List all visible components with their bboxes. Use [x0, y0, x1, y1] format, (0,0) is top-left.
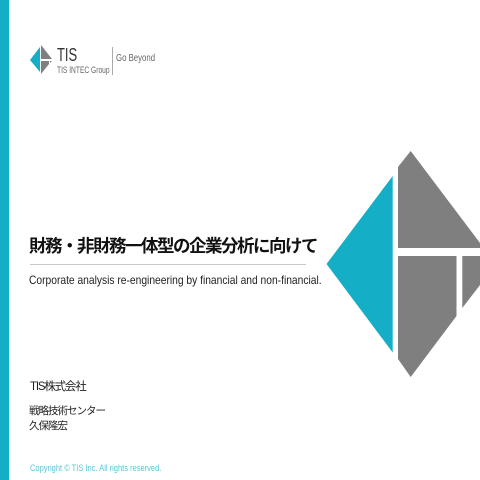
logo icon	[30, 45, 52, 74]
logo wordmark: TIS	[57, 45, 77, 65]
small right gray shape	[462, 256, 480, 308]
title: 財務・非財務一体型の企業分析に向けて	[29, 236, 317, 256]
title rule	[30, 264, 306, 265]
company name: TIS株式会社	[30, 381, 86, 393]
diamond graphic	[326, 151, 480, 377]
logo divider	[112, 47, 113, 75]
left accent bar	[0, 0, 9, 480]
logo: TIS INTEC Group	[30, 45, 155, 75]
lower gray shape	[398, 256, 456, 377]
upper gray shape	[398, 151, 480, 248]
department and author: 久保隆宏	[29, 420, 67, 432]
logo tagline: Go Beyond	[116, 53, 155, 64]
teal triangle	[326, 176, 393, 352]
department and author: 戦略技術センター	[29, 405, 105, 417]
logo group name: TIS INTEC Group	[57, 65, 110, 75]
department and author	[29, 405, 105, 432]
subtitle: Corporate analysis re-engineering by financial and non-financial.	[29, 273, 322, 287]
copyright: Copyright © TIS Inc. All rights reserved.	[30, 463, 161, 474]
